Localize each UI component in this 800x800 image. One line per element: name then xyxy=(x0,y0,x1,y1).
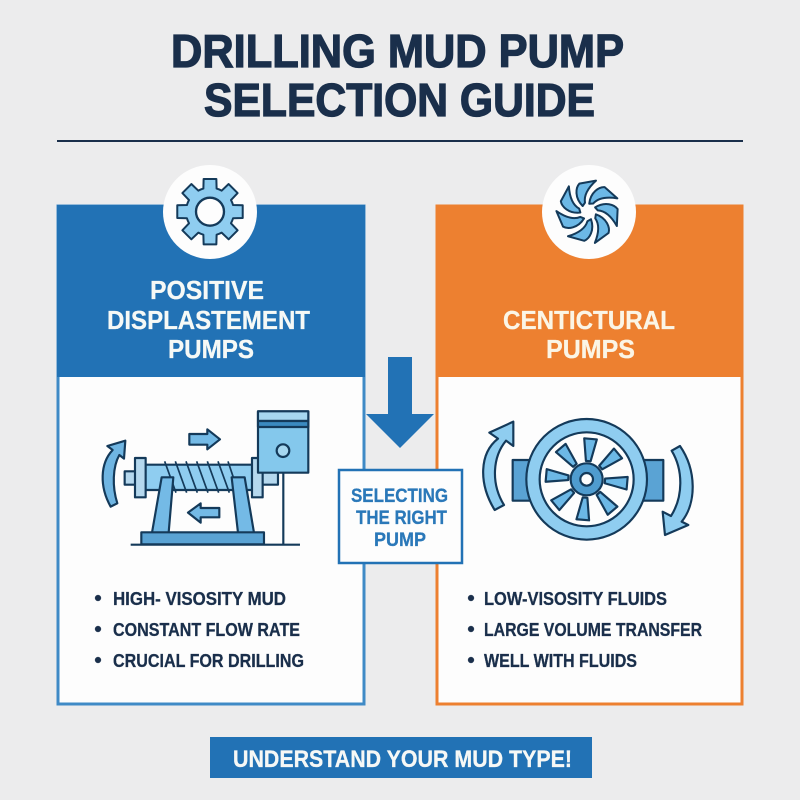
piston cylinder xyxy=(258,411,308,473)
icon: flow arrow right xyxy=(189,429,220,449)
icon: rotation arrow up xyxy=(483,422,513,510)
housing ring xyxy=(533,426,640,533)
callout: selecting the right pump: THE RIGHT xyxy=(356,507,447,529)
bullet list: centrifugal xyxy=(468,588,702,671)
callout: selecting the right pump: PUMP xyxy=(374,529,426,551)
bullet list: centrifugal: WELL WITH FLUIDS xyxy=(484,650,637,671)
panel heading: positive displacement pumps: DISPLASTEMENT xyxy=(107,305,310,335)
icon: flow arrow left xyxy=(188,503,219,523)
screw thread xyxy=(165,461,233,493)
panel heading: centrifugal pumps: CENTICTURAL xyxy=(503,305,675,335)
panel heading: positive displacement pumps: POSITIVE xyxy=(150,275,264,305)
bullet list: centrifugal: LOW-VISOSITY FLUIDS xyxy=(484,588,667,609)
icon badge: gear xyxy=(163,165,257,259)
illustration: centrifugal pump xyxy=(483,419,693,540)
bullet list: positive displacement: CRUCIAL FOR DRILLING xyxy=(113,650,304,671)
panel: centrifugal pumps xyxy=(436,165,743,704)
illustration: piston screw pump xyxy=(103,411,308,545)
impeller hub xyxy=(571,463,603,495)
icon badge: impeller xyxy=(542,165,636,259)
panel: positive displacement pumps xyxy=(57,165,365,704)
panel heading: centrifugal pumps xyxy=(503,305,675,364)
callout: selecting the right pump: SELECTING xyxy=(351,485,448,507)
bullet list: positive displacement: CONSTANT FLOW RATE xyxy=(113,619,300,640)
bullet list: positive displacement xyxy=(95,588,304,671)
title xyxy=(171,25,624,126)
panel heading: positive displacement pumps xyxy=(107,275,310,364)
impeller blades xyxy=(543,435,631,523)
icon: rotation arrow xyxy=(103,441,125,507)
arrow: down to selection xyxy=(366,357,434,448)
callout: selecting the right pump xyxy=(339,470,462,563)
shaft xyxy=(125,471,278,485)
banner: understand your mud type xyxy=(210,737,592,778)
panel header: centrifugal xyxy=(436,205,743,377)
bullet list: centrifugal: LARGE VOLUME TRANSFER xyxy=(484,619,702,640)
panel heading: positive displacement pumps: PUMPS xyxy=(168,334,254,364)
banner: understand your mud type: UNDERSTAND YOUR MUD TYPE! xyxy=(233,746,572,773)
stand xyxy=(152,477,173,533)
panel heading: centrifugal pumps: PUMPS xyxy=(546,334,635,364)
bullet list: positive displacement: HIGH- VISOSITY MUD xyxy=(113,588,286,609)
title: DRILLING MUD PUMP xyxy=(171,25,624,77)
title: SELECTION GUIDE xyxy=(204,74,595,126)
pump ports xyxy=(513,460,663,501)
panel header: positive displacement xyxy=(57,205,365,377)
icon: rotation arrow down xyxy=(663,446,693,535)
